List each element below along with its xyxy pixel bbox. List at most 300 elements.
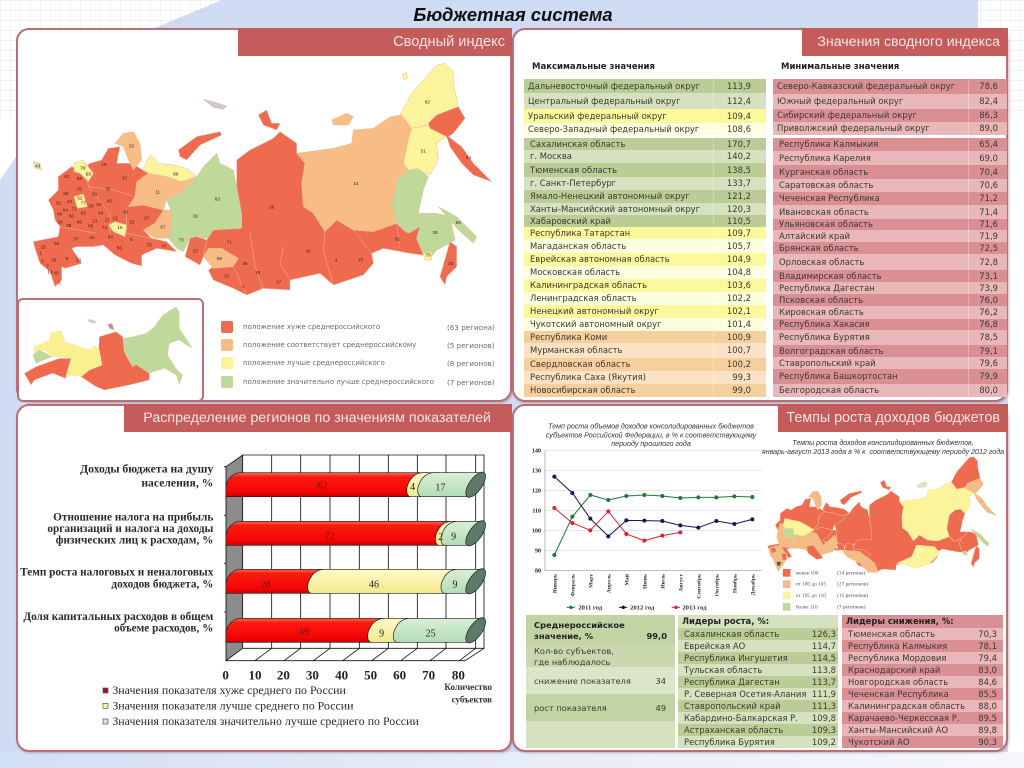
region numbers: 69 (86, 171, 91, 176)
heading: index values: Значения сводного индекса (817, 34, 1000, 50)
table: minimum values: 73,9 (979, 282, 998, 292)
x axis values: 50 (364, 668, 377, 683)
region numbers: 43 (35, 163, 41, 168)
month labels: Апрель (607, 574, 613, 593)
growth map legend: более 110 (796, 603, 818, 610)
region numbers: 71 (227, 240, 232, 245)
region numbers: 50 (69, 214, 74, 219)
table: Russian average: 49 (655, 703, 666, 713)
category labels: Доходы бюджета на душу (80, 462, 213, 475)
map title (762, 439, 1004, 456)
table: maximum values: Хабаровский край (530, 216, 611, 226)
table: minimum values (773, 79, 1007, 397)
x axis values: 20 (277, 668, 290, 683)
region numbers: 20 (448, 261, 454, 266)
table: decline leaders: Калининградская область (848, 700, 965, 710)
table: minimum values: 89,0 (979, 123, 998, 133)
region numbers: 43 (67, 199, 72, 204)
table: minimum values: Саратовская область (779, 180, 873, 190)
table: minimum values: 69,0 (979, 152, 998, 162)
region numbers: 29 (51, 257, 57, 262)
table: minimum values: Белгородская область (779, 385, 879, 395)
region numbers: 62 (54, 241, 60, 246)
line chart legend: 2011 год (579, 605, 603, 612)
heading: index values (802, 28, 1008, 56)
region numbers: 2 (242, 284, 245, 289)
table: maximum values: г. Санкт-Петербург (530, 178, 616, 188)
series 2012 (553, 475, 755, 538)
bar: tax and non-tax revenue growth: 46 (369, 579, 379, 590)
table: maximum values: 112,4 (727, 96, 751, 106)
x axis values: 40 (335, 668, 348, 683)
region numbers: 33 (76, 257, 81, 262)
table: growth leaders: 111,9 (812, 689, 836, 699)
month labels (553, 573, 757, 599)
table: maximum values: Республика Татарстан (530, 228, 630, 238)
region numbers: 55 (117, 246, 122, 251)
category labels: объеме расходов, % (114, 623, 213, 635)
table: minimum values: Сибирский федеральный округ (777, 110, 917, 120)
table: growth leaders: 114,7 (812, 641, 836, 651)
panel: budget revenue growth rates (512, 404, 1010, 754)
region numbers: 56 (92, 192, 97, 197)
table: minimum values: 71,2 (979, 193, 998, 203)
table: decline leaders: 78,1 (978, 641, 997, 651)
region numbers: 58 (77, 176, 82, 181)
chart legend: Значения показателя хуже среднего по России (112, 683, 346, 697)
subheading: maximum values: Максимальные значения (532, 62, 655, 72)
table: maximum values: 138,5 (727, 164, 751, 174)
bar: budget revenue per capita: 62 (317, 481, 327, 492)
table: minimum values: 80,0 (979, 385, 998, 395)
table: growth leaders: Астраханская область (684, 724, 783, 734)
x axis title: субъектов (452, 694, 492, 704)
heading: distribution of regions: Распределение регионов по значениям показателей (143, 410, 491, 426)
table: maximum values: 100,2 (727, 359, 751, 369)
table: decline leaders: Краснодарский край (848, 664, 940, 674)
map legend: положение хуже среднероссийского (243, 323, 380, 331)
table: maximum values: Мурманская область (530, 345, 622, 355)
line chart legend: 2012 год (630, 605, 655, 612)
table: maximum values: 102,2 (727, 293, 751, 303)
map legend: положение лучше среднероссийского (243, 359, 385, 367)
table: maximum values: 101,4 (727, 319, 751, 329)
table: growth leaders: Республика Бурятия (684, 736, 775, 746)
region numbers: 11 (155, 189, 160, 194)
table: decline leaders: 90,3 (978, 737, 997, 747)
table: maximum values: 104,9 (727, 254, 751, 264)
table: minimum values: 71,9 (979, 230, 998, 240)
x axis values: 70 (422, 668, 435, 683)
region numbers: 14 (47, 269, 53, 274)
region numbers: 19 (255, 270, 261, 275)
region numbers: 5 (130, 237, 133, 242)
region numbers: 52 (77, 195, 83, 200)
table: minimum values: Республика Башкортостан (779, 371, 898, 381)
region numbers: 59 (63, 191, 69, 196)
table: minimum values: Орловская область (779, 256, 864, 266)
table: maximum values: 108,6 (727, 124, 751, 134)
y axis values: 140 (532, 449, 541, 455)
region numbers: 17 (276, 280, 282, 285)
region numbers: 68 (456, 220, 461, 225)
category labels (20, 462, 214, 635)
table: growth leaders: Р. Северная Осетия-Алания (684, 688, 806, 698)
table: minimum values: 78,6 (979, 81, 998, 91)
bar: share of capital expenditure: 25 (426, 628, 436, 639)
table: minimum values: Южный федеральный округ (777, 96, 903, 106)
region numbers: 12 (112, 215, 118, 220)
region numbers: 16 (117, 225, 123, 230)
map legend: (8 регионов) (447, 359, 495, 368)
region numbers: 38 (88, 204, 94, 209)
table: decline leaders: 85,5 (978, 689, 997, 699)
region numbers: 23 (105, 218, 110, 223)
category labels: организаций и налога на доходы (47, 523, 214, 535)
region numbers (35, 99, 471, 289)
table: minimum values: 76,0 (979, 294, 998, 304)
month labels: Май (624, 573, 631, 585)
heading: revenue growth rates (778, 404, 1008, 432)
y axis values: 120 (532, 489, 541, 495)
map title: Темпы роста доходов консолидированных бюджетов, (792, 439, 974, 447)
growth map legend: (34 региона) (837, 569, 866, 576)
panel: composite index values (512, 28, 1010, 404)
table: maximum values: 103,6 (727, 280, 751, 290)
x axis values: 0 (222, 668, 229, 683)
table: maximum values: Ямало-Ненецкий автономный округ (530, 191, 690, 201)
table: maximum values: 102,1 (727, 306, 751, 316)
table: minimum values: Ульяновская область (779, 219, 873, 229)
table: maximum values: Свердловская область (530, 359, 631, 369)
region numbers: 18 (101, 162, 107, 167)
map legend: (63 региона) (447, 323, 495, 332)
table: minimum values: 86,3 (979, 110, 998, 120)
region numbers: 24 (466, 155, 471, 160)
table: maximum values: 140,2 (727, 151, 751, 161)
table: decline leaders: 79,4 (978, 653, 997, 663)
table: decline leaders: Чеченская Республика (848, 688, 949, 698)
region numbers: 63 (215, 197, 220, 202)
chart legend (103, 683, 419, 728)
region numbers: 49 (57, 212, 62, 217)
table: decline leaders: 83,0 (978, 665, 997, 675)
table: maximum values: 99,0 (732, 385, 751, 395)
table: minimum values: 72,5 (979, 242, 998, 252)
table: maximum values: Московская область (530, 267, 620, 277)
line chart legend (567, 605, 708, 612)
table: decline leaders (842, 615, 1003, 748)
subheading: minimum values: Минимальные значения (781, 62, 899, 72)
bar: share of capital expenditure (226, 615, 489, 646)
month labels: Июнь (643, 574, 649, 589)
month labels: Сентябрь (696, 574, 703, 599)
table: maximum values: 133,7 (727, 178, 751, 188)
region numbers: 60 (89, 235, 95, 240)
legend: matches (221, 339, 233, 351)
table: minimum values: 76,2 (979, 307, 998, 317)
region numbers: 28 (66, 223, 72, 228)
region numbers: 88 (173, 172, 179, 177)
table: minimum values: 79,9 (979, 371, 998, 381)
table: maximum values: 100,7 (727, 345, 751, 355)
region numbers: 56 (217, 256, 222, 261)
table: maximum values: Ненецкий автономный округ (530, 306, 659, 316)
table: decline leaders: Лидеры снижения, %: (846, 616, 954, 626)
month labels: Октябрь (714, 574, 721, 596)
table: Russian average: 34 (655, 676, 666, 686)
region numbers: 74 (102, 225, 107, 230)
region numbers: 64 (108, 235, 113, 240)
bar: tax ratio: 72 (325, 531, 335, 542)
region numbers: 13 (92, 219, 98, 224)
category labels: Темп роста налоговых и неналоговых (20, 567, 214, 579)
map legend (221, 321, 495, 388)
table: minimum values: 71,4 (979, 206, 998, 216)
region numbers: 66 (77, 220, 82, 225)
table: minimum values: 78,5 (979, 332, 998, 342)
category labels: Отношение налога на прибыль (53, 511, 213, 523)
table: maximum values: Тюменская область (530, 164, 617, 174)
map of Russia by composite index (33, 63, 492, 296)
region numbers: 14 (353, 181, 359, 186)
category labels: доходов бюджета, % (111, 578, 213, 590)
growth map legend: менее 100 (796, 570, 819, 576)
table: maximum values: Центральный федеральный округ (528, 96, 681, 106)
table: minimum values: Кировская область (779, 307, 864, 317)
table: minimum values: Северо-Кавказский федеральный округ (777, 81, 955, 91)
growth map legend: (15 регионов) (837, 592, 868, 599)
legend: worse (221, 321, 233, 333)
table: decline leaders: 88,0 (978, 701, 997, 711)
region numbers: 25 (41, 244, 46, 249)
bar: tax ratio (226, 518, 489, 549)
region numbers: 82 (425, 99, 430, 104)
table: growth leaders: 126,3 (812, 629, 836, 639)
region numbers: 72 (71, 206, 77, 211)
region numbers: 64 (63, 208, 68, 213)
line chart legend: 2013 год (683, 605, 708, 612)
region numbers: 77 (81, 200, 86, 205)
region numbers: 51 (421, 148, 426, 153)
table: minimum values: Республика Хакасия (779, 319, 870, 329)
title: Бюджетная система (413, 4, 613, 25)
y axis values: 80 (535, 569, 541, 575)
table: Russian average: рост показателя (534, 703, 607, 713)
table: decline leaders: Чукотский АО (848, 736, 910, 746)
category labels: населения, % (141, 476, 213, 489)
heading: composite index (238, 28, 512, 56)
table: minimum values: Волгоградская область (779, 346, 883, 356)
stacked 3D bar chart (20, 454, 492, 728)
bar: budget revenue per capita (226, 469, 489, 500)
region numbers: 46 (242, 261, 248, 266)
map of Russia by revenue growth (768, 456, 997, 611)
table: growth leaders: 113,7 (812, 677, 836, 687)
region numbers: 4 (335, 258, 338, 263)
region numbers: 27 (144, 215, 150, 220)
table: Russian average: Среднероссийское (534, 620, 625, 630)
region numbers: 8 (66, 256, 69, 261)
line chart title: периоду прошлого года (612, 440, 691, 448)
region numbers: 31 (395, 237, 400, 242)
table: Russian average: значение, % (534, 630, 593, 640)
table: minimum values: 82,4 (979, 96, 998, 106)
table: minimum values: Приволжский федеральный округ (777, 123, 930, 133)
x axis values: 30 (306, 668, 319, 683)
table: maximum values: Магаданская область (530, 240, 626, 250)
table: growth leaders: Республика Дагестан (684, 676, 780, 686)
table: maximum values (524, 79, 766, 397)
table: minimum values: 79,6 (979, 358, 998, 368)
series 2011 (553, 493, 755, 557)
heading: revenue growth rates: Темпы роста доходов бюджетов (786, 410, 1000, 426)
table: maximum values: 110,5 (727, 216, 751, 226)
line chart title: субъектов Российской Федерации, в % к соответствующему (546, 431, 757, 439)
bar: tax and non-tax revenue growth (226, 566, 489, 597)
legend: significantly better (221, 376, 233, 388)
table: maximum values: 104,8 (727, 267, 751, 277)
region numbers: 41 (306, 248, 311, 253)
month labels: Декабрь (750, 574, 757, 595)
table: minimum values: Республика Калмыкия (779, 139, 878, 149)
x axis values: 60 (393, 668, 406, 683)
table: decline leaders: Карачаево-Черкесская Р. (848, 712, 960, 722)
region numbers: 1 (39, 250, 42, 255)
table: maximum values: Ленинградская область (530, 293, 637, 303)
growth map legend (783, 569, 868, 611)
table: maximum values: Северо-Западный федеральный округ (528, 124, 699, 134)
table: decline leaders: Республика Мордовия (848, 652, 946, 662)
table: maximum values: Уральский федеральный округ (528, 110, 667, 120)
y axis values: 90 (535, 549, 541, 555)
bar: tax ratio: 9 (451, 531, 456, 542)
region numbers: 7 (46, 264, 49, 269)
bar: share of capital expenditure: 9 (379, 628, 384, 639)
region numbers: 3 (41, 259, 44, 264)
table: growth leaders: 109,3 (812, 725, 836, 735)
table: growth leaders: 113,8 (812, 665, 836, 675)
series 2013 (553, 506, 683, 543)
line chart title: Темп роста объемов доходов консолидированных бюджетов (549, 422, 754, 430)
table: growth leaders: Республика Ингушетия (684, 652, 788, 662)
region numbers: 65 (88, 223, 94, 228)
table: minimum values: Курганская область (779, 166, 868, 176)
map legend: положение значительно лучше среднероссийского (243, 378, 434, 386)
table: decline leaders: 84,6 (978, 677, 997, 687)
region numbers: 53 (129, 144, 135, 149)
region numbers: 15 (129, 219, 135, 224)
y axis values: 130 (532, 469, 541, 475)
table: maximum values: 99,3 (732, 372, 751, 382)
table: maximum values: Ханты-Мансийский автономный округ (530, 204, 700, 214)
map legend: (5 регионов) (447, 341, 495, 350)
inset: federal districts map (17, 298, 204, 402)
panel: distribution of regions (16, 404, 513, 754)
table: growth leaders: 114,5 (812, 653, 836, 663)
table: growth leaders: Лидеры роста, %: (682, 616, 769, 626)
region numbers: 61 (64, 174, 70, 179)
region numbers: 34 (57, 220, 63, 225)
region numbers: 35 (56, 200, 61, 205)
region numbers: 54 (98, 210, 104, 215)
line chart: revenue growth by month (532, 422, 762, 612)
y axis values (532, 449, 541, 575)
bar: tax and non-tax revenue growth: 28 (261, 579, 271, 590)
table: Russian average: 99,0 (647, 631, 667, 641)
table: growth leaders (678, 615, 838, 748)
table: Russian average: где наблюдалось (534, 656, 610, 666)
region numbers: 78 (80, 165, 86, 170)
region numbers: 57 (193, 248, 199, 253)
x axis values: 80 (452, 668, 465, 683)
x axis values: 10 (248, 668, 262, 683)
table: minimum values: Псковская область (779, 294, 863, 304)
bar: tax ratio: 2 (438, 532, 443, 543)
x axis values (222, 668, 465, 683)
table: decline leaders: Тюменская область (848, 628, 935, 638)
region numbers: 3 (58, 280, 61, 285)
chart legend: Значения показателя лучше среднего по России (112, 698, 354, 712)
table: decline leaders: 70,3 (978, 629, 997, 639)
table: growth leaders: 109,2 (812, 737, 836, 747)
region numbers: 70 (77, 187, 82, 192)
bar: tax and non-tax revenue growth: 9 (452, 579, 458, 590)
region numbers: 32 (122, 176, 127, 181)
table: decline leaders: Республика Калмыкия (848, 640, 947, 650)
region numbers: 38 (432, 230, 438, 235)
legend: better (221, 357, 233, 369)
map title: январь-август 2013 года в % к соответствующему периоду 2012 года (762, 448, 1004, 456)
table: maximum values: 170,7 (727, 138, 751, 148)
chart legend: Значения показателя значительно лучше среднего по России (112, 714, 419, 728)
month labels: Март (589, 574, 595, 588)
region numbers: 42 (123, 209, 129, 214)
table: maximum values: 120,3 (727, 204, 751, 214)
region numbers: 81 (193, 214, 199, 219)
table: Russian average: Кол-во субъектов, (534, 646, 614, 656)
table: minimum values: Ставропольский край (779, 358, 876, 368)
table: maximum values: Новосибирская область (530, 385, 636, 395)
table: growth leaders: Еврейская АО (684, 640, 745, 650)
panel: composite index map (16, 28, 513, 404)
table: minimum values: 70,6 (979, 180, 998, 190)
bar: share of capital expenditure: 49 (299, 627, 309, 638)
table: minimum values: Ивановская область (779, 206, 869, 216)
table: minimum values: 79,1 (979, 346, 998, 356)
table: growth leaders: Кабардино-Балкарская Р. (684, 712, 798, 722)
region numbers: 60 (96, 202, 102, 207)
heading: composite index: Сводный индекс (393, 34, 505, 50)
region numbers: 67 (160, 224, 166, 229)
category labels: физических лиц к расходам, % (56, 535, 213, 547)
table: maximum values: Калининградская область (530, 280, 647, 290)
table: minimum values: Владимирская область (779, 270, 882, 280)
region numbers: 47 (161, 244, 167, 249)
region numbers: 37 (73, 237, 79, 242)
table: maximum values: 109,4 (727, 110, 751, 120)
growth map legend: (7 регионов) (837, 603, 866, 610)
table: growth leaders: 109,8 (812, 713, 836, 723)
table: maximum values: 113,9 (727, 80, 751, 90)
chart walls and grid (224, 455, 484, 661)
table: maximum values: Чукотский автономный округ (530, 319, 662, 329)
region numbers: 79 (425, 253, 431, 258)
heading: distribution of regions (124, 404, 512, 432)
table: maximum values: Республика Саха (Якутия) (530, 372, 646, 382)
region numbers: 75 (146, 243, 152, 248)
table: minimum values: 73,1 (979, 270, 998, 280)
